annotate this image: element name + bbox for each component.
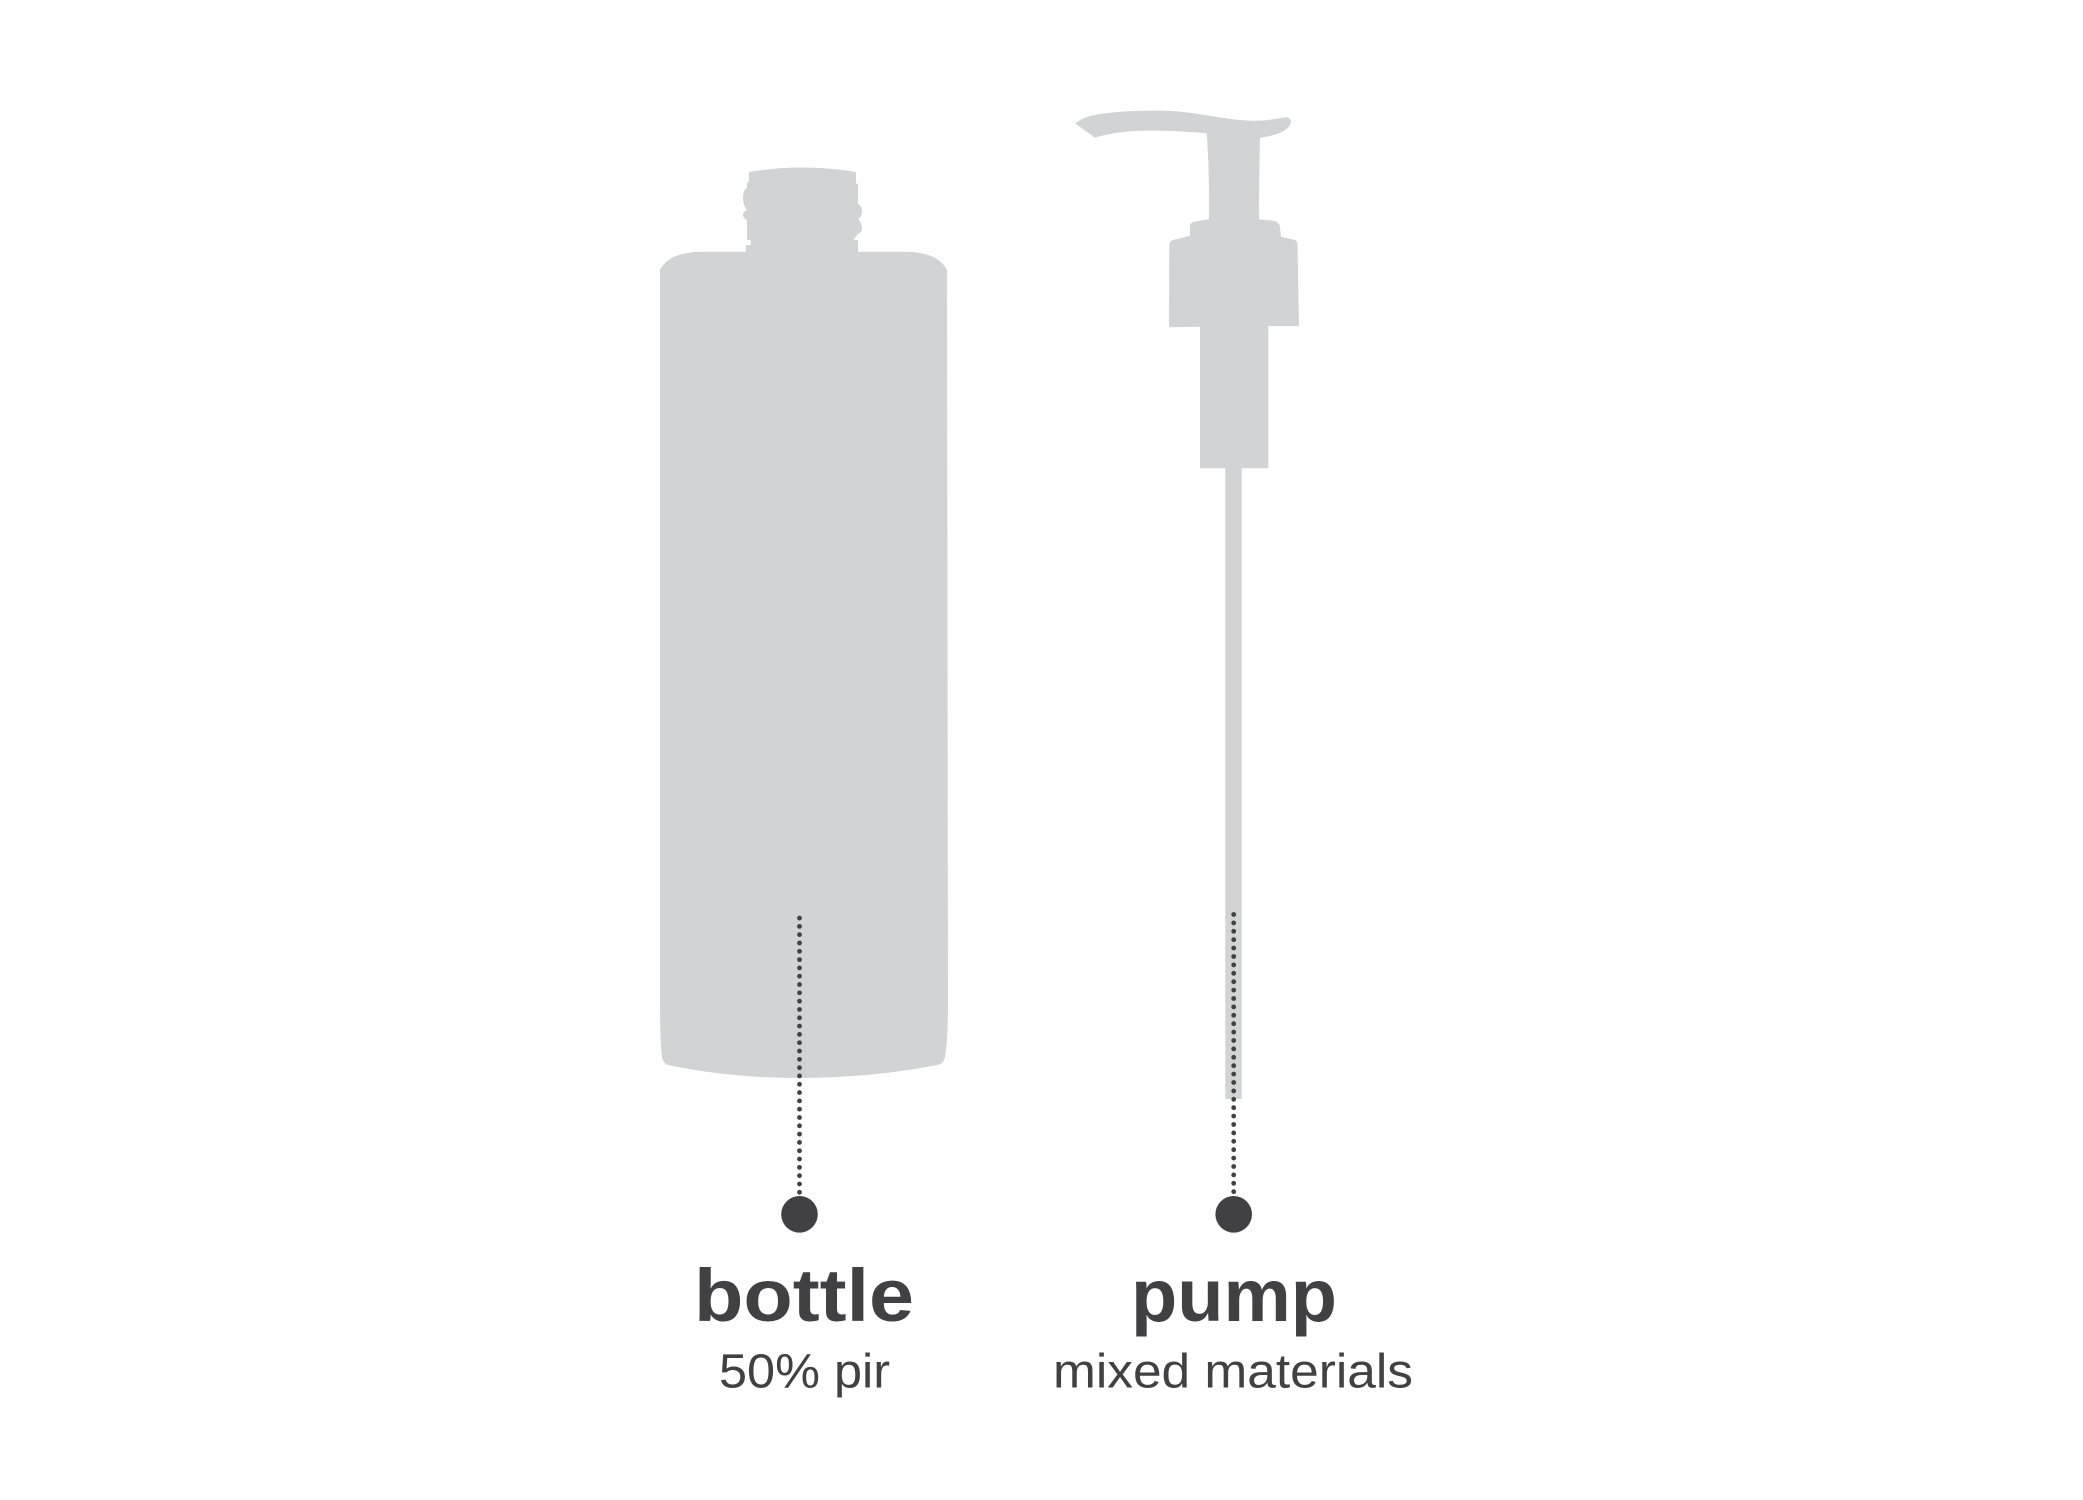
bottle heading: bottle [694, 1254, 914, 1337]
bottle silhouette [660, 168, 948, 1078]
pump callout leader [1215, 914, 1252, 1233]
bottle callout leader [781, 912, 818, 1233]
pump material text: mixed materials [1053, 1346, 1413, 1398]
pump heading: pump [1131, 1254, 1337, 1337]
bottle material text: 50% pir [719, 1346, 890, 1398]
pump silhouette [1075, 111, 1299, 1099]
